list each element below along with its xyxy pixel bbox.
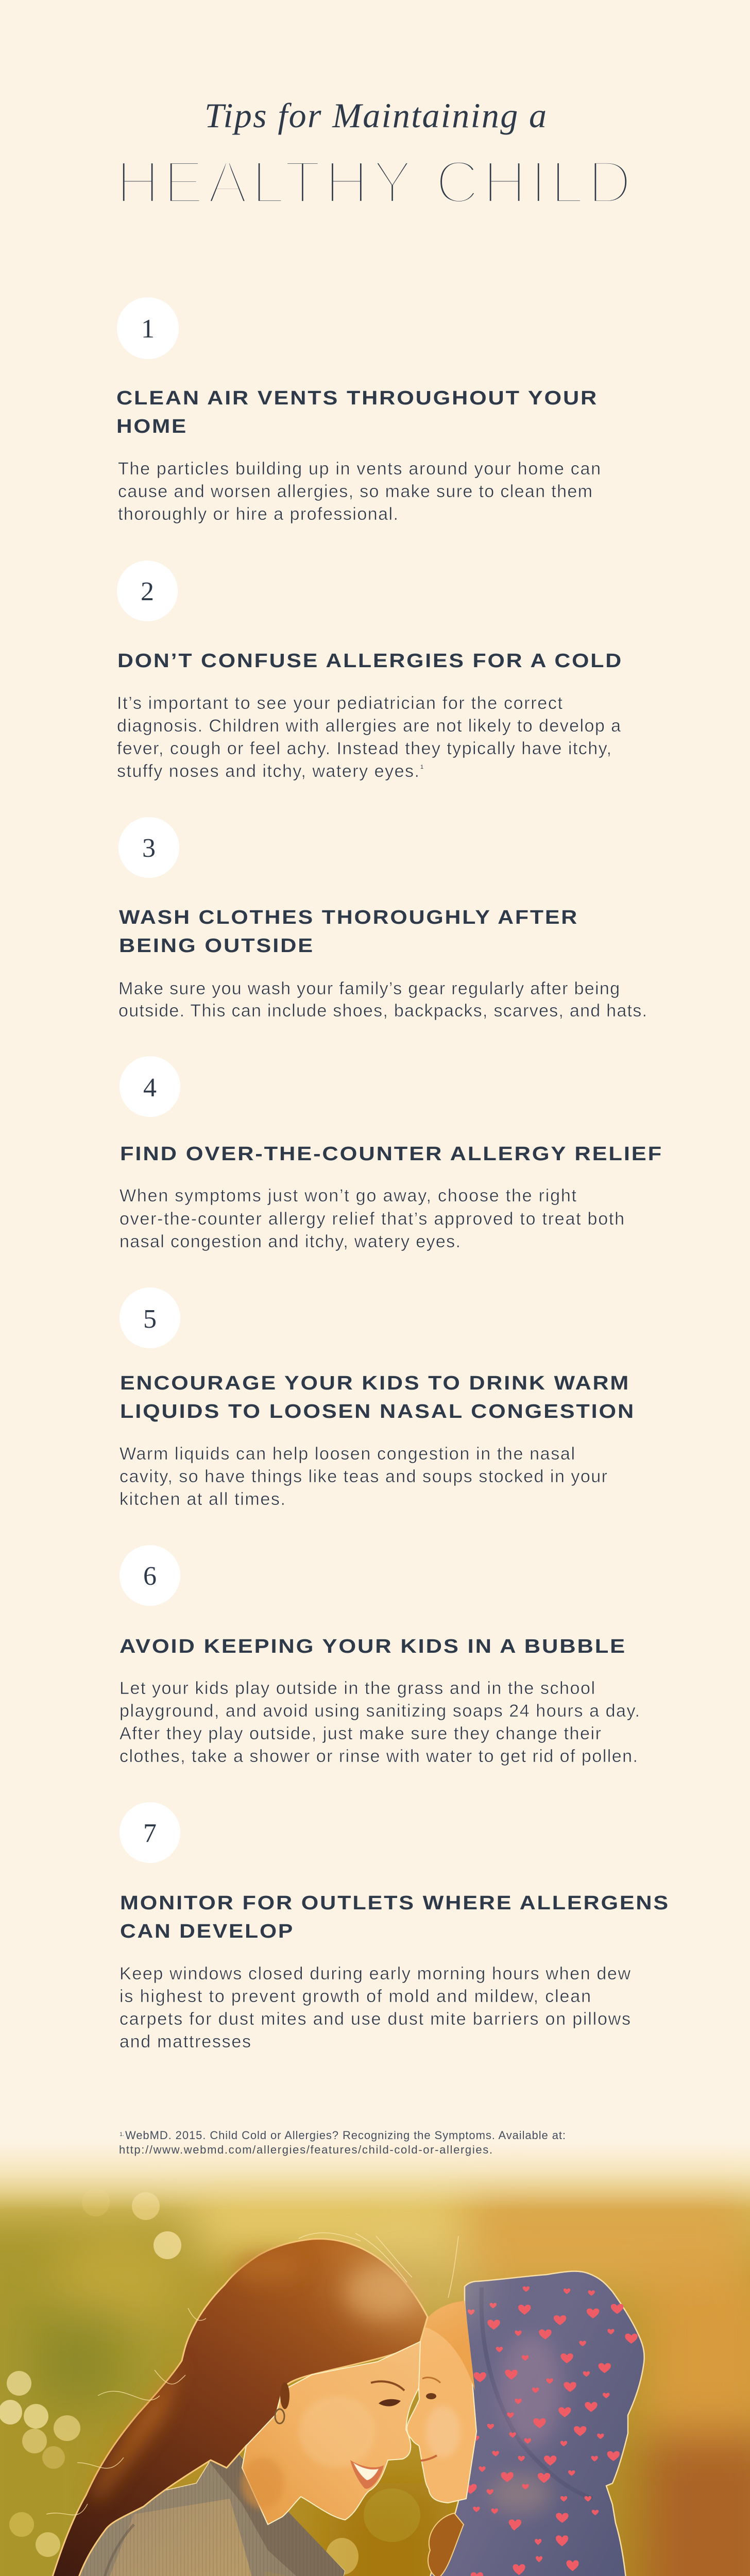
number badge 1	[117, 297, 179, 359]
bokeh lights	[0, 2189, 420, 2576]
tip 2 body	[117, 693, 621, 781]
top fade into cream	[0, 2112, 750, 2210]
tip 1 body: cause and worsen allergies, so make sure to clean them	[118, 482, 592, 501]
number badge 4: 4	[143, 1073, 157, 1103]
tip 3 body: Make sure you wash your family’s gear regularly after being	[118, 979, 620, 998]
title script line: Tips for Maintaining a	[204, 96, 547, 135]
tip 4 body: over-the-counter allergy relief that’s approved to treat both	[120, 1209, 624, 1229]
footnote: http://www.webmd.com/allergies/features/child-cold-or-allergies.	[119, 2143, 492, 2156]
tip 4 body: When symptoms just won’t go away, choose the right	[120, 1186, 577, 1206]
tip 1 body: The particles building up in vents around your home can	[118, 459, 601, 479]
collar	[209, 2454, 345, 2576]
tip 5 heading: ENCOURAGE YOUR KIDS TO DRINK WARM	[120, 1372, 630, 1394]
tip 3 heading: WASH CLOTHES THOROUGHLY AFTER	[119, 907, 578, 928]
tip 2 body: stuffy noses and itchy, watery eyes.	[117, 761, 419, 781]
tip 3 body: outside. This can include shoes, backpacks, scarves, and hats.	[118, 1001, 647, 1021]
tip 5 body: kitchen at all times.	[120, 1489, 285, 1509]
tip 3	[118, 817, 647, 1021]
tip 3 heading: BEING OUTSIDE	[119, 935, 314, 957]
hearts on hood and chest	[351, 2286, 638, 2576]
number badge 3	[118, 817, 179, 878]
tip 6 body: After they play outside, just make sure they change their	[120, 1724, 601, 1743]
chest panel and pocket	[264, 2571, 286, 2576]
title	[116, 96, 632, 216]
tip 6 body: clothes, take a shower or rinse with water to get rid of pollen.	[120, 1747, 638, 1766]
flyaway hair strands	[0, 2233, 458, 2576]
tip 6 heading: AVOID KEEPING YOUR KIDS IN A BUBBLE	[120, 1636, 626, 1657]
tip 5 body: Warm liquids can help loosen congestion in the nasal	[120, 1444, 575, 1464]
warm sun haze	[340, 2236, 484, 2329]
number badge 3: 3	[142, 834, 156, 863]
tip 7 body	[120, 1964, 630, 2052]
tip 7 body: Keep windows closed during early morning hours when dew	[120, 1964, 630, 1984]
tip 6 body	[120, 1679, 640, 1766]
tip 1 body: thoroughly or hire a professional.	[118, 504, 398, 524]
tip 1 heading: CLEAN AIR VENTS THROUGHOUT YOUR	[116, 387, 598, 409]
tip 2 body: fever, cough or feel achy. Instead they typically have itchy,	[117, 739, 611, 758]
number badge 1: 1	[141, 314, 155, 344]
number badge 5	[120, 1287, 180, 1348]
number badge 2: 2	[141, 577, 154, 606]
tip 4	[120, 1056, 663, 1251]
child hoodie	[330, 2272, 644, 2576]
title main line: HEALTHY CHILD	[116, 148, 632, 216]
tip 1	[116, 297, 601, 524]
tip 2 body: It’s important to see your pediatrician for the correct	[117, 693, 563, 713]
tip 2	[117, 561, 623, 781]
tip 7 body: and mattresses	[120, 2032, 251, 2052]
tip 2 heading: DON’T CONFUSE ALLERGIES FOR A COLD	[117, 650, 623, 672]
tip 6 body: Let your kids play outside in the grass and in the school	[120, 1679, 595, 1698]
tip 2 body: diagnosis. Children with allergies are not likely to develop a	[117, 716, 621, 736]
tip 5 body: cavity, so have things like teas and soups stocked in your	[120, 1467, 607, 1486]
photo background: blurred golden field	[0, 2128, 750, 2576]
number badge 2	[117, 561, 178, 621]
number badge 5: 5	[143, 1304, 157, 1334]
jacket sleeve panel	[110, 2499, 251, 2576]
number badge 6: 6	[143, 1562, 157, 1591]
tip 4 heading: FIND OVER-THE-COUNTER ALLERGY RELIEF	[120, 1143, 663, 1165]
tip 7 heading	[120, 1892, 670, 1942]
tip 7 heading: CAN DEVELOP	[120, 1921, 294, 1942]
number badge 4	[120, 1056, 180, 1117]
tip 1 body	[118, 459, 601, 524]
child face	[407, 2301, 476, 2503]
tip 4 body	[120, 1186, 624, 1251]
footnote: WebMD. 2015. Child Cold or Allergies? Recognizing the Symptoms. Available at:	[125, 2129, 566, 2142]
mother jacket	[80, 2454, 345, 2576]
tip 5 body	[120, 1444, 607, 1509]
tip 7 body: is highest to prevent growth of mold and mildew, clean	[120, 1987, 591, 2006]
tip 7	[120, 1802, 670, 2052]
tip 7 heading: MONITOR FOR OUTLETS WHERE ALLERGENS	[120, 1892, 670, 1914]
tip 5 heading	[120, 1372, 635, 1422]
tip 6	[120, 1545, 640, 1766]
tip 1 heading: HOME	[116, 416, 187, 437]
child curls	[428, 2513, 464, 2576]
mother hair	[0, 2233, 458, 2576]
tip 2 body: 1	[420, 764, 423, 770]
footnote: 1.	[120, 2131, 124, 2138]
tip 3 heading	[119, 907, 578, 957]
tip 7 body: carpets for dust mites and use dust mite barriers on pillows	[120, 2009, 630, 2029]
tip 5 heading: LIQUIDS TO LOOSEN NASAL CONGESTION	[120, 1401, 635, 1422]
number badge 7	[120, 1802, 180, 1863]
tip 6 body: playground, and avoid using sanitizing soaps 24 hours a day.	[120, 1701, 640, 1721]
tip 4 body: nasal congestion and itchy, watery eyes.	[120, 1232, 461, 1251]
number badge 6	[120, 1545, 180, 1606]
number badge 7: 7	[143, 1819, 157, 1848]
tip 5	[120, 1287, 635, 1509]
footnote	[119, 2129, 566, 2156]
tip 1 heading	[116, 387, 598, 437]
tip 3 body	[118, 979, 647, 1021]
photo: mother and child at sunset	[0, 2112, 750, 2576]
mother face	[241, 2342, 420, 2524]
